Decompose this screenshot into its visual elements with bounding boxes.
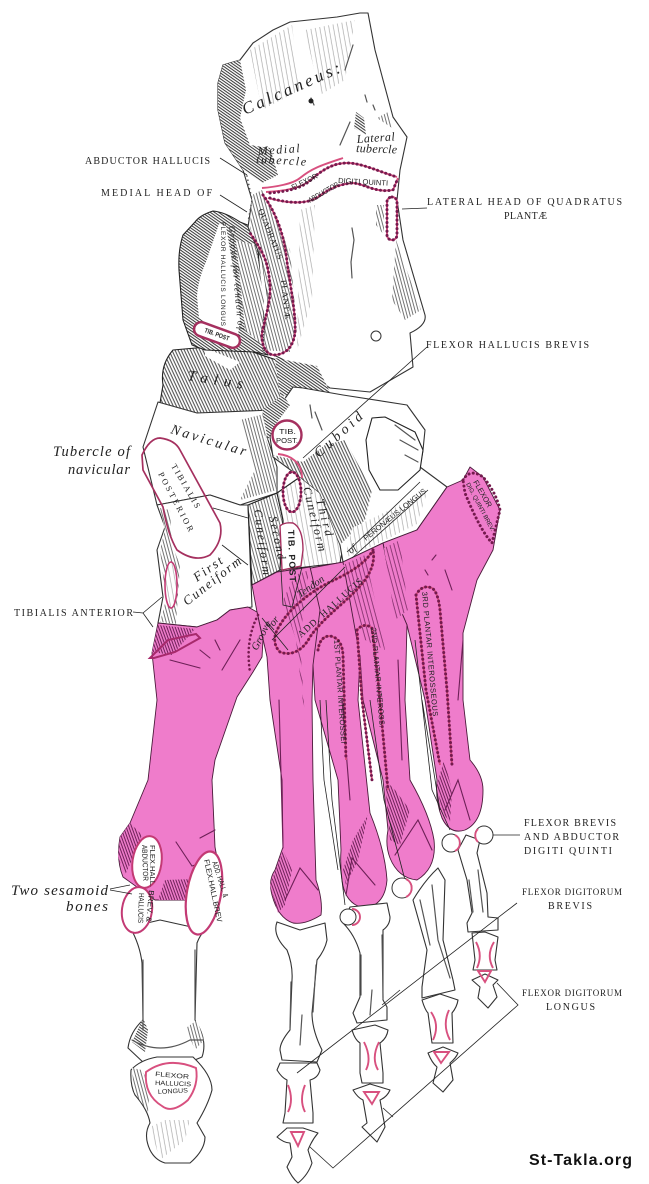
bone names: tubercle [256, 152, 307, 169]
groove for peroneus tendon on metatarsal: Tendon [295, 574, 327, 600]
groove for peroneus tendon on metatarsal: Groove [250, 619, 274, 652]
calcaneus upper light hatch [250, 20, 355, 110]
bone names: Talus [186, 368, 244, 393]
groove for peroneus longus: of [346, 542, 360, 556]
leader lines [110, 158, 520, 1168]
sesamoid bones and flexor hallucis brevis areas: HALLUCIS [136, 893, 146, 923]
origin: flexor and abductor bands: ABDUCTOR [306, 180, 341, 205]
label: flexor brevis and abductor digiti quinti: FLEXOR BREVIS [524, 818, 616, 829]
metatarsal 2 [252, 567, 321, 923]
origin: flexor hallucis brevis [278, 454, 302, 512]
origin: tibialis posterior on sustentaculum [192, 320, 242, 350]
toe 5 phalanges [458, 835, 498, 1008]
origin: adductor hallucis [275, 550, 374, 653]
origin: flexor and abductor bands: FLEXOR [290, 171, 320, 192]
sesamoid bones and flexor hallucis brevis areas: ABDUCTOR [140, 845, 150, 882]
bone: sustentaculum and groove [179, 211, 268, 355]
label: tubercle of navicular: Tubercle of [53, 444, 132, 460]
calcaneus detail strokes [297, 45, 421, 350]
toe 2 phalanges [276, 922, 327, 1183]
bone: navicular [143, 402, 277, 505]
metatarsal 3 [300, 562, 387, 908]
bone: third cuneiform [277, 477, 343, 570]
bone names: Third [313, 497, 337, 538]
bone names: Lateral [355, 129, 396, 146]
bone: talus [160, 347, 297, 413]
origin: tibialis posterior on cuboid: TIB. [279, 427, 296, 436]
label: flexor brevis and abductor digiti quinti: AND ABDUCTOR [524, 832, 619, 843]
calcaneus left shading [218, 60, 278, 183]
bone: calcaneus [218, 13, 425, 392]
bone: second cuneiform [248, 493, 283, 585]
label: flexor hallucis brevis: FLEXOR HALLUCIS BREVIS [426, 340, 589, 351]
label: flexor brevis and abductor digiti quinti: DIGITI QUINTI [524, 846, 612, 857]
origin: flexor and abductor bands [262, 158, 398, 205]
metatarsal 5 [383, 467, 500, 831]
bone names: First [189, 553, 226, 585]
groove for peroneus longus [346, 482, 428, 558]
origin: tibialis posterior on navicular: TIBIALIS [169, 462, 204, 512]
groove label: Groove for tendon of [227, 225, 246, 331]
bone names: Cuneiform [180, 553, 244, 608]
label: flexor digitorum longus [522, 988, 622, 1013]
origin: flexor digiti quinti: FLEXOR [471, 478, 494, 509]
label: flexor digitorum brevis [522, 887, 622, 912]
origin: quadratus plantae medial head: QUADRATUS [256, 207, 285, 261]
tendon lines between metatarsals [320, 640, 450, 905]
origin: tibialis posterior on navicular: POSTERIOR [156, 470, 196, 534]
muscle marks on toes [288, 942, 494, 1146]
origin: quadratus plantae medial head [247, 176, 295, 355]
navicular shading [240, 412, 277, 500]
toe 3 phalanges [343, 903, 390, 1142]
sesamoid bones and flexor hallucis brevis areas: ADD. HALL. & [210, 860, 230, 899]
shadow between calcaneus and cuboid [275, 358, 330, 398]
toe 4 phalanges [413, 868, 458, 1092]
label: two sesamoid bones: Two sesamoid [11, 883, 108, 899]
metatarsal shading [118, 540, 470, 913]
bone names: Calcaneus: [239, 57, 345, 119]
bone: first cuneiform [157, 495, 252, 627]
origin: adductor hallucis: ADD. HALLUCIS [296, 577, 365, 640]
origin: plantar interossei: 1ST PLANTAR INTEROSSEI [332, 640, 348, 744]
origin: tibialis posterior on cuneiforms and metatarsal: TIB. POST [286, 530, 298, 583]
label: lateral head of quadratus plantae: LATERAL HEAD OF QUADRATUS [427, 197, 622, 208]
origin: flexor digiti quinti [463, 473, 500, 543]
bone names: Second [266, 515, 289, 562]
bone names: Cuboid [312, 409, 367, 461]
bone names: Medial [256, 141, 301, 158]
bone names: Cuneiform [300, 485, 330, 553]
origin: tibialis posterior on sustentaculum: TIB. POST [203, 327, 230, 343]
origin: quadratus plantae medial head: PLANTÆ [279, 279, 292, 320]
origin: flexor hallucis longus [146, 1063, 197, 1109]
bone names: tubercle [356, 141, 398, 156]
watermark: St-Takla.org [529, 1152, 632, 1169]
origin: tibialis posterior on navicular [142, 438, 221, 558]
groove label [219, 222, 246, 331]
bone names: Cuneiform [251, 508, 274, 576]
origin: flexor and abductor bands: DIGITI QUINTI [338, 176, 388, 188]
label: flexor digitorum longus: FLEXOR DIGITORUM [522, 988, 622, 998]
label: medial head of: MEDIAL HEAD OF [101, 188, 212, 199]
origin: flexor hallucis longus: HALLUCIS [155, 1080, 192, 1088]
sesamoid bones and flexor hallucis brevis areas: FLEX.HALL. [148, 845, 157, 887]
sesamoid bones and flexor hallucis brevis areas [119, 834, 230, 937]
label: abductor hallucis: ABDUCTOR HALLUCIS [85, 156, 210, 167]
origin: flexor digiti quinti: DIG. QUINTI BREV. [464, 482, 495, 533]
label: tubercle of navicular: navicular [68, 462, 130, 478]
origin: tibialis anterior [165, 562, 177, 608]
sesamoid bones and flexor hallucis brevis areas: BREV. & [144, 890, 156, 922]
quadratus shading [250, 190, 297, 352]
origin: plantar interossei: 3RD PLANTAR INTEROSSEOUS [420, 591, 440, 717]
sesamoid: toes 2 to 5 [340, 826, 493, 925]
label: tubercle of navicular [53, 444, 132, 478]
origin: quadratus plantae lateral head [387, 197, 397, 240]
metatarsal 4 [343, 543, 434, 880]
toe 1 phalanges [128, 920, 212, 1163]
sesamoid bones and flexor hallucis brevis areas: FLEX.HALL.BREV [202, 859, 224, 923]
origin: flexor hallucis longus: LONGUS [158, 1087, 189, 1096]
metatarsal 1 [119, 607, 263, 900]
origin: plantar interossei: 2ND PLANTAR INTEROSS. [369, 627, 387, 728]
origin: tibialis posterior on cuboid: POST. [276, 436, 298, 445]
bone names [168, 57, 398, 608]
label: two sesamoid bones: bones [66, 899, 108, 915]
origin: tibialis posterior on cuboid [272, 420, 302, 450]
groove for peroneus longus: PERONÆUS LONGUS [362, 486, 428, 543]
origin: flexor hallucis longus: FLEXOR [155, 1071, 190, 1081]
label: lateral head of quadratus plantae [427, 197, 622, 222]
bone: cuboid [262, 387, 447, 562]
groove for peroneus tendon on metatarsal [249, 567, 345, 672]
label: two sesamoid bones [11, 883, 108, 915]
label: flexor digitorum longus: LONGUS [546, 1002, 595, 1013]
origin: tibialis posterior on cuneiforms and metatarsal [280, 523, 303, 607]
label: flexor brevis and abductor digiti quinti [524, 818, 619, 857]
bone names: Navicular [168, 422, 248, 460]
label: tibialis anterior: TIBIALIS ANTERIOR [14, 608, 133, 619]
origin: plantar interossei [318, 587, 452, 790]
label: lateral head of quadratus plantae: PLANTÆ [504, 211, 547, 222]
label: flexor digitorum brevis: FLEXOR DIGITORUM [522, 887, 622, 897]
label: flexor digitorum brevis: BREVIS [548, 901, 592, 912]
groove label: FLEXOR HALLUCIS LONGUS [219, 222, 226, 327]
groove for peroneus tendon on metatarsal: for [266, 614, 282, 631]
